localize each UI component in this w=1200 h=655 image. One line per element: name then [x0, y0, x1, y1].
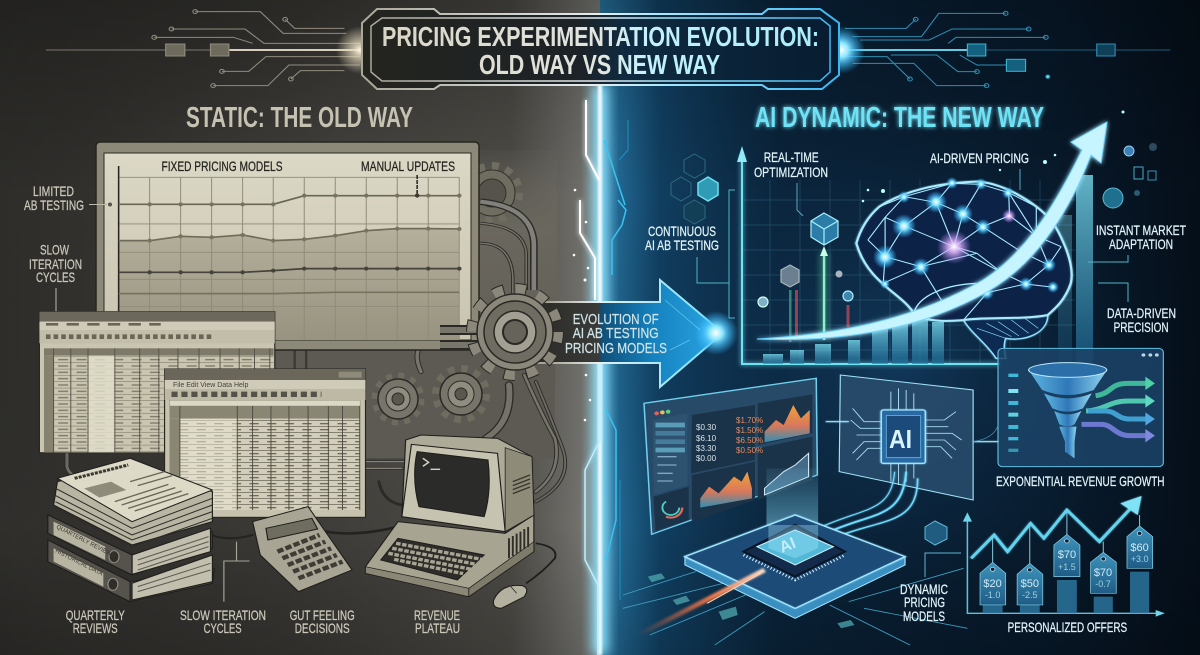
circuit lines: new side: [837, 11, 1170, 88]
dashboard values: $6.10: [696, 434, 717, 443]
label: data-driven precision: [1098, 283, 1176, 335]
price tag values: +3.0: [1131, 554, 1148, 564]
dashboard values: $6.50%: [736, 436, 763, 445]
label: real-time optimization: [754, 149, 828, 180]
label: AI-driven pricing: AI-DRIVEN PRICING: [930, 150, 1029, 166]
dashboard values: $1.50%: [736, 426, 763, 435]
panel: old pricing chart monitor: [96, 142, 479, 350]
label: personalized offers: PERSONALIZED OFFERS: [1008, 619, 1127, 635]
binder labels: HISTORICAL DATA: [54, 548, 104, 578]
price tag values: $50: [1021, 578, 1039, 590]
connector: dynamic pricing leader: [925, 553, 961, 577]
icon: calculator: [253, 507, 352, 592]
panel: analytics dashboard: [644, 378, 817, 534]
label: quarterly reviews: [66, 607, 125, 636]
label: continuous AI AB testing: CONTINUOUS: [648, 223, 716, 239]
label: instant market adaptation: [1088, 222, 1186, 262]
label: dynamic pricing models: MODELS: [903, 608, 945, 624]
label: data-driven precision: PRECISION: [1114, 319, 1169, 335]
arrow text: EVOLUTION OF: [573, 311, 659, 328]
label: slow iteration cycles: SLOW: [40, 242, 70, 258]
price tag values: $70: [1094, 567, 1112, 579]
price tag values: $20: [983, 578, 1002, 590]
label: fixed pricing models: FIXED PRICING MODELS: [162, 158, 282, 174]
icon: AI processor platform: [623, 515, 967, 645]
label: data-driven precision: DATA-DRIVEN: [1107, 305, 1176, 321]
label: continuous AI AB testing: [645, 190, 735, 318]
label: limited AB testing: [24, 183, 112, 213]
icon: binders and papers: [48, 458, 214, 602]
brain nodes: [873, 177, 1059, 311]
label: slow iteration cycles: ITERATION: [29, 256, 82, 272]
icon: glowing cubes: [758, 213, 853, 307]
label: real-time optimization: OPTIMIZATION: [754, 164, 828, 180]
binder labels: [54, 524, 116, 578]
title text: OLD WAY VS NEW WAY: [479, 49, 720, 80]
arrow: evolution of AI AB testing pricing models: [520, 280, 738, 387]
arrow text: [565, 311, 667, 357]
panel: holographic AI chip card: [839, 375, 973, 500]
label: gut feeling decisions: GUT FEELING: [290, 607, 355, 623]
binder labels: QUARTERLY REVIEWS: [55, 524, 116, 559]
price tag values: -1.0: [985, 590, 1000, 600]
icon: neural network brain: [856, 182, 1072, 358]
arrow text: PRICING MODELS: [565, 340, 667, 357]
label: slow iteration cycles bottom: CYCLES: [204, 620, 242, 636]
price tag values: -2.5: [1022, 590, 1038, 600]
label: instant market adaptation: ADAPTATION: [1109, 236, 1173, 252]
AI chip text: AI: [889, 424, 912, 454]
icon: retro computer: [224, 435, 555, 608]
heading: static the old way: STATIC: THE OLD WAY: [186, 102, 413, 134]
back panel and cables: old side: [67, 150, 565, 538]
label: dynamic pricing models: [900, 581, 948, 624]
connector: data flow from platform to AI card: [766, 422, 998, 545]
label: quarterly reviews: QUARTERLY: [66, 607, 125, 623]
dashboard values: $0.30: [696, 423, 717, 432]
title text: PRICING EXPERIMENTATION EVOLUTION:: [382, 21, 819, 52]
label: slow iteration cycles: [29, 242, 82, 314]
price tag values: $70: [1058, 549, 1076, 561]
dashboard values: $1.70%: [736, 416, 763, 425]
icon: main gear: [440, 290, 557, 374]
panel: funnel: [998, 348, 1163, 467]
price tag values: [983, 542, 1149, 600]
price tag values: $60: [1130, 542, 1149, 554]
dashboard values: $0.00: [696, 454, 717, 463]
label: revenue plateau: PLATEAU: [415, 620, 460, 636]
chart: AI growth axes and grid: [737, 110, 1124, 364]
panel: spreadsheet window front: [165, 369, 365, 517]
icon: floating orbs and small icons: [1103, 143, 1157, 208]
label: slow iteration cycles bottom: SLOW ITERATION: [180, 607, 266, 623]
dashboard values: $0.50%: [736, 446, 763, 455]
menu text: File Edit View Data Help: [173, 382, 248, 389]
label: slow iteration cycles: CYCLES: [36, 269, 75, 285]
label: dynamic pricing models: DYNAMIC: [900, 581, 948, 597]
chart: personalized price tags: [963, 496, 1165, 617]
dashboard values: $3.30: [696, 444, 717, 453]
label: revenue plateau: [414, 607, 460, 636]
label: real-time optimization: REAL-TIME: [764, 149, 819, 165]
platform AI text: AI: [777, 535, 798, 557]
title banner: [336, 9, 865, 89]
label: continuous AI AB testing: AI AB TESTING: [645, 237, 719, 253]
circuit lines: old side: [46, 10, 360, 88]
arrow: exponential growth: [757, 122, 1107, 340]
dashboard values: [696, 416, 763, 463]
label: dynamic pricing models: PRICING: [904, 594, 945, 610]
icon: small gears: [375, 369, 486, 422]
label: manual updates: MANUAL UPDATES: [361, 158, 455, 174]
label: limited AB testing: AB TESTING: [24, 197, 84, 213]
line chart: fixed pricing: [119, 166, 462, 340]
arrow text: AI AB TESTING: [573, 325, 659, 342]
background: old way side: [0, 0, 600, 655]
growth streaks: [789, 246, 850, 342]
price tag values: +1.5: [1058, 562, 1076, 572]
heading: AI dynamic the new way: AI DYNAMIC: THE NEW WAY: [755, 102, 1044, 134]
title text: [382, 21, 819, 80]
bars: [763, 175, 1093, 364]
small cube: [925, 521, 947, 545]
center energy divider: [573, 84, 628, 655]
price tag values: -0.7: [1095, 579, 1111, 589]
icon: hexagon cluster: [671, 154, 718, 224]
label: gut feeling decisions: DECISIONS: [295, 620, 350, 636]
label: limited AB testing: LIMITED: [33, 183, 74, 199]
panel: spreadsheet window back: [39, 312, 275, 453]
label: revenue plateau: REVENUE: [414, 607, 460, 623]
label: quarterly reviews: REVIEWS: [73, 620, 118, 636]
icon: rear gear and pipes: [465, 166, 534, 293]
label: slow iteration cycles bottom: [180, 607, 266, 636]
label: gut feeling decisions: [290, 607, 355, 636]
